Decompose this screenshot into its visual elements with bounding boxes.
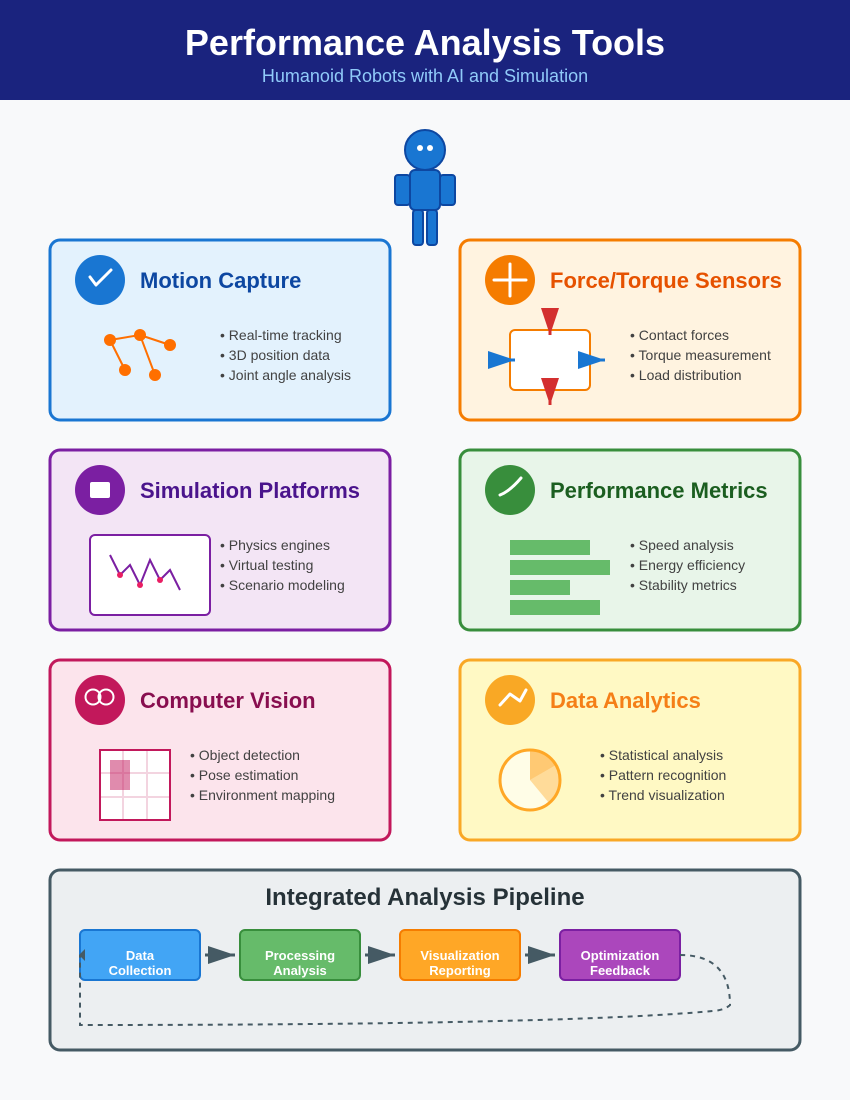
chart: simulation trace xyxy=(90,535,210,615)
step: processing analysis: Analysis xyxy=(273,963,327,978)
step: data collection xyxy=(80,930,200,980)
icon: screen xyxy=(75,465,125,515)
text: vision features xyxy=(190,747,335,803)
icon: overlapping circles xyxy=(75,675,125,725)
panel: simulation platforms xyxy=(50,450,390,630)
icon: humanoid robot xyxy=(395,130,455,245)
step: processing analysis xyxy=(240,930,360,980)
step: data collection: Collection xyxy=(109,963,171,978)
text: simulation features: • Scenario modeling xyxy=(220,577,345,593)
step: processing analysis: Processing xyxy=(265,948,335,963)
icon: rising curve xyxy=(485,465,535,515)
arrow: feedback loop xyxy=(79,949,730,1025)
text: analytics features: • Trend visualization xyxy=(600,787,725,803)
panel: integrated analysis pipeline xyxy=(50,870,800,1050)
text: force sensor features: • Load distribution xyxy=(630,367,742,383)
text: simulation features: • Virtual testing xyxy=(220,557,313,573)
panel: data analytics xyxy=(460,660,800,840)
step: data collection: Data xyxy=(126,948,155,963)
icon: plus xyxy=(485,255,535,305)
heading: computer vision: Computer Vision xyxy=(140,688,316,713)
text: analytics features: • Statistical analysis xyxy=(600,747,723,763)
heading: data analytics: Data Analytics xyxy=(550,688,701,713)
arrow: visualization to optimization xyxy=(525,946,555,964)
text: vision features: • Object detection xyxy=(190,747,300,763)
text: performance features: • Stability metrics xyxy=(630,577,737,593)
subtitle: Humanoid Robots with AI and Simulation xyxy=(262,66,588,86)
step: optimization feedback xyxy=(560,930,680,980)
text: force sensor features: • Contact forces xyxy=(630,327,729,343)
text: motion capture features xyxy=(220,327,351,383)
title: Performance Analysis Tools xyxy=(185,22,665,63)
text: motion capture features: • Joint angle analysis xyxy=(220,367,351,383)
text: simulation features: • Physics engines xyxy=(220,537,330,553)
text: force sensor features xyxy=(630,327,771,383)
icon: check mark xyxy=(75,255,125,305)
diagram: sensor box with force arrows xyxy=(488,308,605,405)
text: force sensor features: • Torque measurement xyxy=(630,347,771,363)
heading: performance metrics: Performance Metrics xyxy=(550,478,768,503)
text: analytics features: • Pattern recognition xyxy=(600,767,726,783)
text: vision features: • Environment mapping xyxy=(190,787,335,803)
heading: force/torque sensors: Force/Torque Sensors xyxy=(550,268,782,293)
panel: performance metrics xyxy=(460,450,800,630)
heading: simulation platforms: Simulation Platforms xyxy=(140,478,360,503)
text: performance features: • Energy efficiency xyxy=(630,557,745,573)
bar chart xyxy=(510,540,610,615)
arrow: processing to visualization xyxy=(365,946,395,964)
icon: trend line xyxy=(485,675,535,725)
panel: motion capture xyxy=(50,240,390,420)
text: analytics features xyxy=(600,747,726,803)
heading: motion capture: Motion Capture xyxy=(140,268,301,293)
text: performance features xyxy=(630,537,745,593)
step: visualization reporting xyxy=(400,930,520,980)
step: optimization feedback: Feedback xyxy=(590,963,651,978)
text: vision features: • Pose estimation xyxy=(190,767,298,783)
heading: pipeline: Integrated Analysis Pipeline xyxy=(265,884,585,911)
step: visualization reporting: Reporting xyxy=(429,963,491,978)
diagram: detection grid xyxy=(100,750,170,820)
panel: computer vision xyxy=(50,660,390,840)
header banner xyxy=(0,0,850,100)
text: simulation features xyxy=(220,537,345,593)
text: motion capture features: • Real-time tracking xyxy=(220,327,342,343)
text: motion capture features: • 3D position data xyxy=(220,347,330,363)
pie chart xyxy=(500,750,560,810)
text: performance features: • Speed analysis xyxy=(630,537,734,553)
panel: force/torque sensors xyxy=(460,240,800,420)
step: visualization reporting: Visualization xyxy=(420,948,500,963)
diagram: skeleton tracking nodes xyxy=(104,329,176,381)
step: optimization feedback: Optimization xyxy=(581,948,659,963)
arrow: collection to processing xyxy=(205,946,235,964)
